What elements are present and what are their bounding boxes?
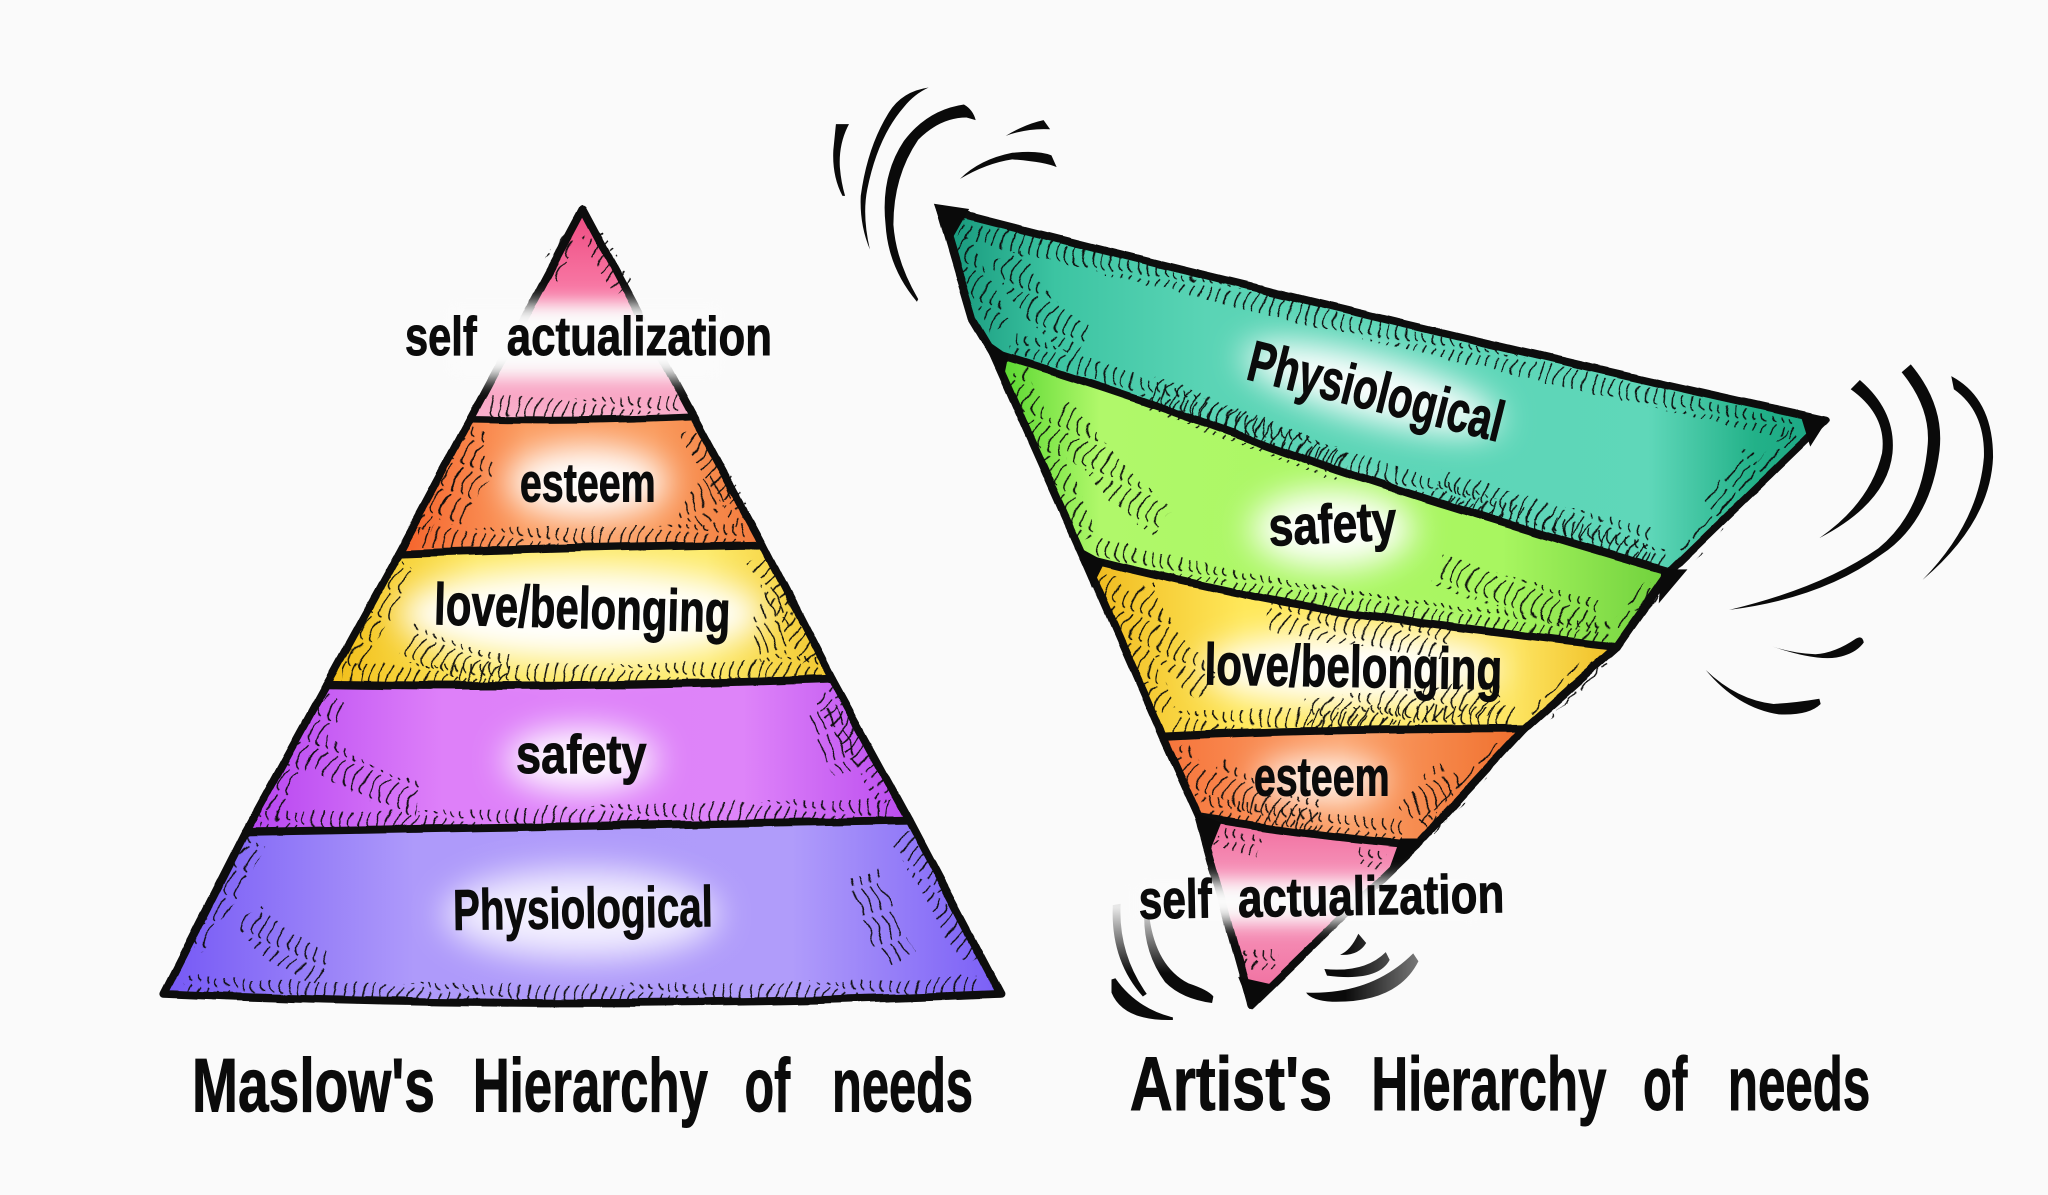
title: Maslow's Hierarchy of needs: Maslow's: [192, 1043, 435, 1128]
label: safety (left): safety: [516, 723, 647, 785]
label: Physiological (left): Physiological: [453, 875, 713, 943]
panel: Artist's funnel: [934, 204, 1829, 1010]
label fade: [1134, 880, 1486, 923]
label: self actualization (left): actualization: [507, 305, 772, 367]
title: Maslow's Hierarchy of needs: Hierarchy: [473, 1043, 708, 1128]
band: physiological: [163, 820, 1000, 1003]
band: safety: [993, 353, 1669, 646]
label: esteem (right): esteem: [1254, 745, 1390, 807]
label: self actualization (right): actualization: [1237, 862, 1505, 929]
band: self actualization: [1199, 818, 1417, 1006]
icon: motion lines top left: [833, 88, 1057, 302]
label: love/belonging (left): love/belonging: [433, 572, 731, 645]
band: esteem: [398, 417, 763, 554]
title: Maslow's Hierarchy of needs: of: [745, 1043, 791, 1128]
title: Artist's Hierarchy of needs: Artist's: [1130, 1042, 1332, 1127]
band: love/belonging: [327, 545, 832, 686]
label: self actualization (left): [405, 305, 772, 367]
band: esteem: [1162, 729, 1524, 845]
corner ink wedges: [934, 204, 1829, 1010]
label fade: [444, 303, 725, 379]
label: self actualization (right): self: [1138, 867, 1213, 931]
title: Artist's Hierarchy of needs: of: [1643, 1042, 1688, 1127]
label: Physiological (right): Physiological: [1242, 329, 1510, 455]
icon: motion lines bottom: [1112, 904, 1418, 1020]
title: Artist's Hierarchy of needs: [1130, 1042, 1870, 1127]
label: self actualization (left): self: [405, 305, 477, 367]
title: Maslow's Hierarchy of needs: needs: [832, 1043, 973, 1128]
band: physiological: [940, 209, 1826, 572]
title: Artist's Hierarchy of needs: Hierarchy: [1371, 1042, 1606, 1127]
icon: motion lines right: [1706, 364, 1993, 715]
title: Maslow's Hierarchy of needs: [192, 1043, 973, 1128]
outline and dividers: [163, 209, 1000, 1003]
label: love/belonging (right): love/belonging: [1204, 632, 1503, 703]
outline and dividers: [940, 209, 1826, 1006]
panel: Maslow's pyramid: [163, 209, 1000, 1003]
glow highlights: [398, 445, 764, 959]
hatching: [957, 227, 1796, 960]
label: safety (right): safety: [1267, 489, 1398, 558]
glow highlights: [1202, 323, 1508, 801]
hatching: [183, 232, 980, 995]
band: self actualization: [470, 209, 694, 420]
band: safety: [246, 679, 909, 832]
label: esteem (left): esteem: [520, 452, 656, 514]
band: love/belonging: [1084, 558, 1617, 737]
title: Artist's Hierarchy of needs: needs: [1728, 1042, 1870, 1127]
label: self actualization (right): [1138, 862, 1505, 931]
